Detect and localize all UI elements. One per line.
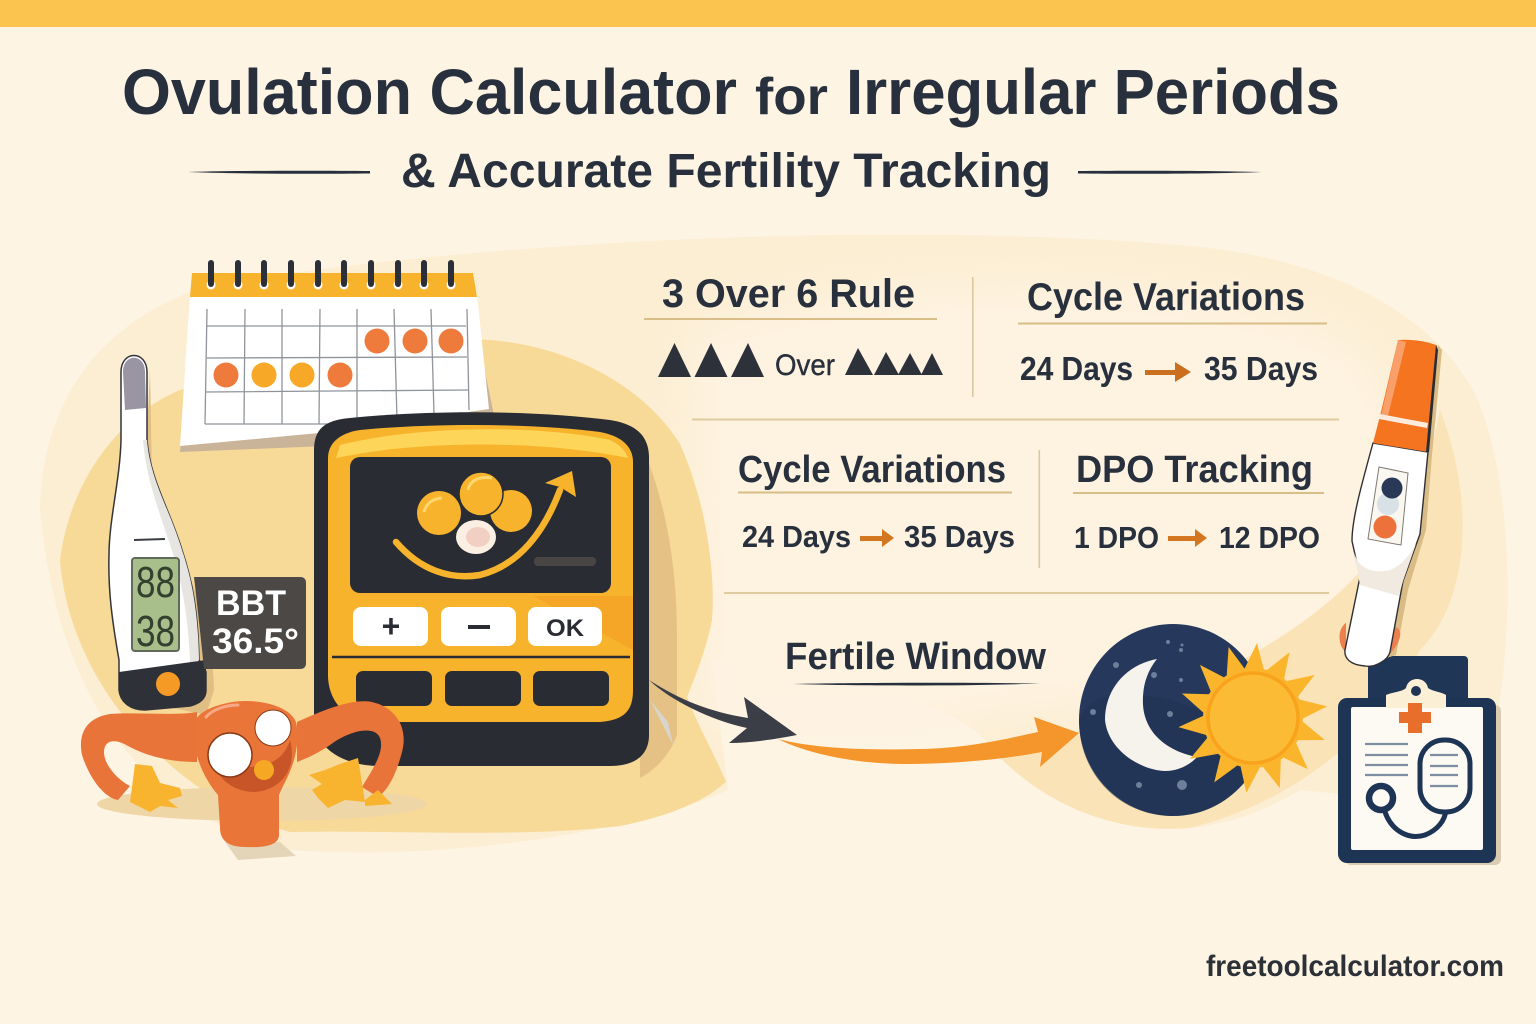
- calculator screen: [350, 457, 611, 593]
- screen: rising curve arrow: [396, 471, 576, 576]
- buttons: plus minus ok: +: [382, 608, 400, 644]
- title: Irregular Periods: [846, 56, 1340, 128]
- panel: DPO tracking: 12 DPO: [1219, 520, 1320, 555]
- arrow: calculator to fertile window: [649, 680, 797, 743]
- subtitle: [188, 145, 1262, 198]
- panel: cycle variations lower: [738, 449, 1015, 554]
- buttons: dark row: [356, 671, 609, 706]
- arrow: [860, 529, 894, 547]
- panel: 3 Over 6 Rule: 3 Over 6 Rule: [662, 272, 915, 316]
- buttons: plus minus ok: OK: [546, 615, 585, 642]
- label: BBT 36.5: [194, 577, 306, 669]
- icon: thermometer: [109, 356, 214, 715]
- title: Ovulation Calculator: [122, 56, 737, 128]
- panel: cycle variations top: 35 Days: [1204, 350, 1318, 387]
- arrow: [1145, 362, 1191, 382]
- buttons: plus minus ok: [353, 607, 602, 646]
- panel: cycle variations top: [1018, 276, 1327, 387]
- sun: [1177, 643, 1329, 793]
- label: BBT 36.5: BBT: [216, 584, 286, 623]
- arrow: orange to moon and sun: [778, 717, 1079, 767]
- website footer: freetoolcalculator.com: [1206, 950, 1504, 983]
- panel: DPO tracking: 1 DPO: [1074, 520, 1159, 555]
- icon: moon and sun: [1079, 624, 1329, 816]
- subtitle: & Accurate Fertility Tracking: [401, 145, 1051, 198]
- icon: thermometer: 88: [136, 558, 175, 607]
- icon row: triangles over triangles: [658, 343, 943, 382]
- panel: 3 Over 6 Rule: [644, 272, 943, 382]
- title: for: [755, 68, 828, 126]
- panel: fertile window heading: Fertile Window: [785, 636, 1046, 678]
- icon: test stick: [1340, 340, 1442, 666]
- icon row: triangles over triangles: Over: [775, 349, 835, 382]
- moon crescent: [1105, 659, 1197, 771]
- panel: cycle variations lower: Cycle Variations: [738, 449, 1006, 491]
- panel: cycle variations lower: 24 Days: [742, 519, 851, 554]
- panel: cycle variations lower: 35 Days: [904, 519, 1015, 554]
- arrow: [1168, 529, 1207, 547]
- panel: cycle variations top: Cycle Variations: [1027, 276, 1305, 319]
- label: BBT 36.5: 36.5°: [212, 622, 299, 661]
- panel: DPO tracking: [1073, 449, 1324, 555]
- panel: DPO tracking: DPO Tracking: [1076, 449, 1313, 491]
- icon: uterus and ovaries: [81, 701, 427, 860]
- icon: thermometer: 38: [136, 607, 175, 656]
- title: [122, 56, 1340, 128]
- icon: calculator device: [314, 412, 649, 766]
- panel: cycle variations top: 24 Days: [1020, 350, 1133, 387]
- icon: clipboard with stethoscope: [1338, 656, 1501, 865]
- icon: calendar: [180, 263, 495, 452]
- screen: follicles: [417, 472, 532, 554]
